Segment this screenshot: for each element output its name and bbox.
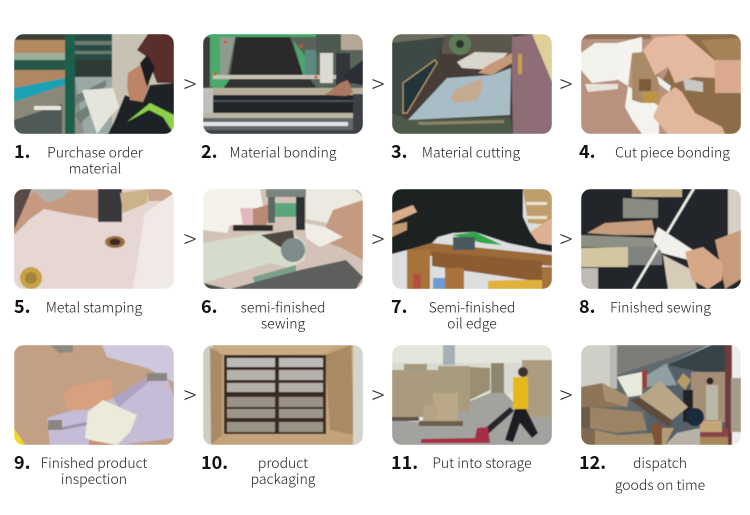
caption 6: sewing [261, 314, 306, 334]
photo 8: sewing finished bag [581, 189, 741, 289]
arrow 3 to 4: > [560, 65, 572, 100]
arrow 11 to 12: > [560, 376, 572, 411]
number 7: 7. [391, 293, 407, 319]
photo 10: packed carton [203, 345, 363, 445]
number 3: 3. [391, 138, 407, 164]
step 2: material bonding [201, 34, 363, 164]
photo 7: oiling edge of black leather [392, 189, 552, 289]
caption 9: inspection [61, 469, 127, 489]
arrow 9 to 10: > [184, 376, 196, 411]
caption 5: Metal stamping [46, 298, 143, 318]
number 10: 10. [201, 449, 228, 475]
arrow 7 to 8: > [560, 220, 572, 255]
number 6: 6. [201, 293, 217, 319]
step 7: semi-finished oil edge [391, 189, 552, 334]
arrow 5 to 6: > [184, 220, 196, 255]
photo 11: warehouse with pallet jack [392, 345, 552, 445]
number 1: 1. [14, 138, 30, 164]
step 8: finished sewing [579, 189, 741, 319]
number 5: 5. [14, 293, 30, 319]
step 4: cut piece bonding [579, 34, 741, 164]
step 6: semi-finished sewing [201, 189, 363, 334]
photo 12: loading container [581, 345, 741, 445]
step 1: purchase order material [14, 34, 174, 178]
number 2: 2. [201, 138, 217, 164]
caption 3: Material cutting [422, 142, 520, 162]
caption 8: Finished sewing [610, 298, 711, 318]
photo 3: cutting press [392, 33, 552, 134]
photo 1: worker phoning in warehouse [14, 34, 174, 134]
number 8: 8. [579, 293, 595, 319]
number 4: 4. [579, 138, 595, 164]
step 5: metal stamping [14, 189, 174, 319]
arrow 2 to 3: > [372, 65, 384, 100]
number 12: 12. [579, 449, 606, 475]
arrow 6 to 7: > [372, 220, 384, 255]
caption 10: packaging [251, 469, 316, 489]
step 9: finished product inspection [14, 345, 174, 489]
caption 2: Material bonding [230, 142, 337, 162]
photo 2: bonding rollers [203, 34, 363, 134]
photo 9: gloved inspection of lilac bag [14, 345, 174, 445]
number 11: 11. [391, 449, 418, 475]
caption 12 line 2: goods on time [615, 475, 705, 495]
caption 1: material [69, 158, 121, 178]
caption 4: Cut piece bonding [615, 142, 730, 162]
arrow 10 to 11: > [372, 376, 384, 411]
photo 5: stamping a metal rivet [14, 189, 174, 289]
number 9: 9. [14, 449, 30, 475]
caption 11: Put into storage [432, 453, 532, 473]
step 12: dispatch goods on time [579, 345, 741, 495]
caption 10: product [258, 453, 308, 473]
caption 7: oil edge [447, 314, 497, 334]
arrow 1 to 2: > [184, 65, 196, 100]
caption 6: semi-finished [240, 298, 326, 318]
caption 7: Semi-finished [429, 298, 515, 318]
step 10: product packaging [201, 345, 363, 489]
caption 1: Purchase order [47, 142, 143, 162]
caption 12 line 1: dispatch [633, 453, 687, 473]
step 3: material cutting [391, 33, 552, 164]
step 11: put into storage [391, 345, 552, 475]
photo 6: sewing machine [203, 189, 363, 289]
photo 4: hands assembling buckle [581, 34, 741, 134]
caption 9: Finished product [41, 453, 147, 473]
